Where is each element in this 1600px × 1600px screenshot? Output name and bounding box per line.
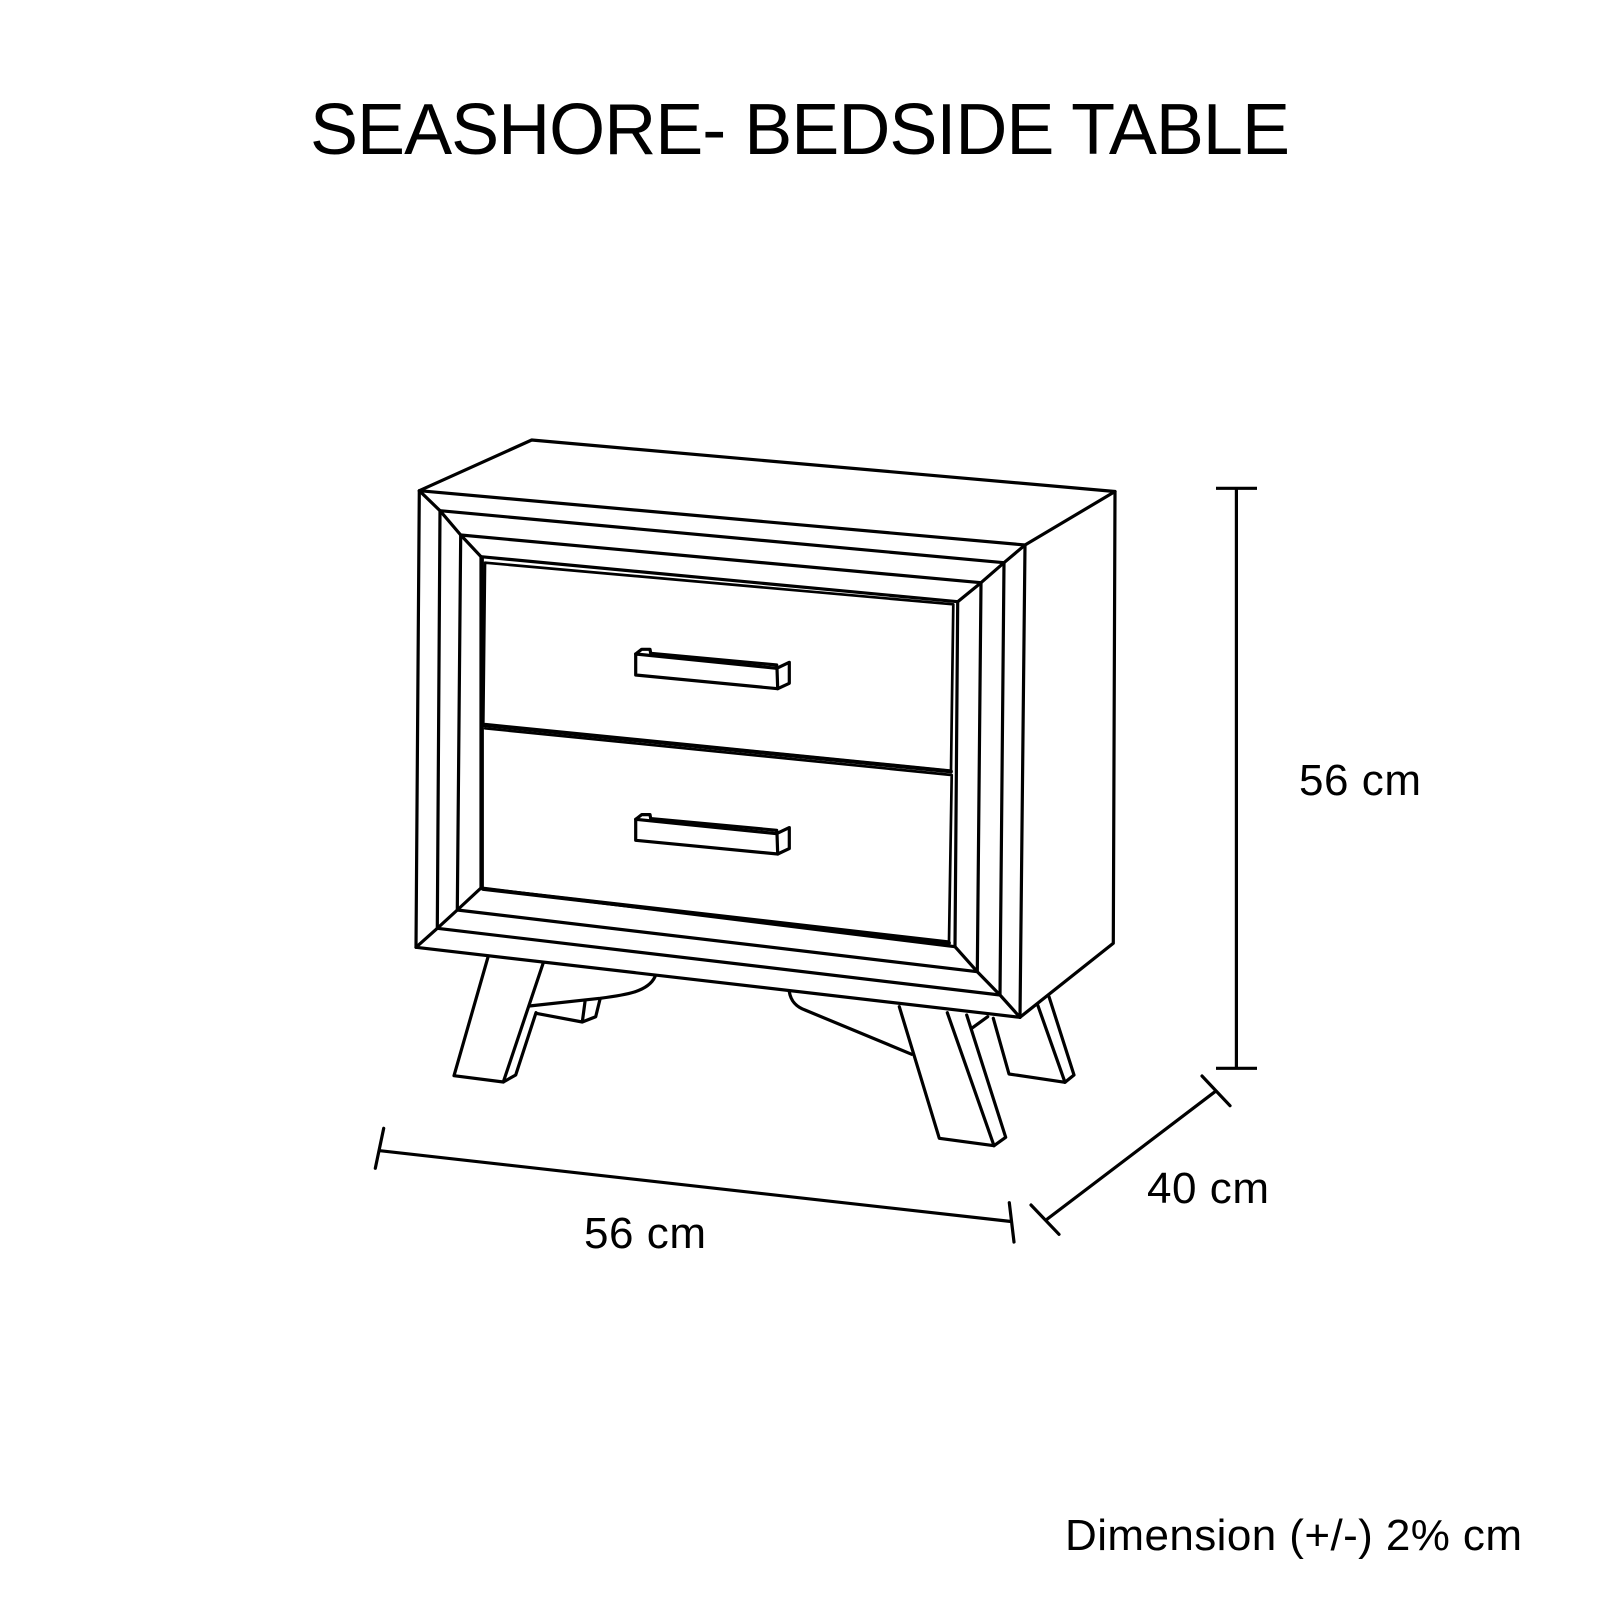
height label: 56 cm: [1299, 756, 1421, 805]
height dimension line: [1216, 488, 1257, 1068]
cabinet body: [416, 440, 1115, 1017]
width dimension line: [375, 1128, 1014, 1242]
frame mouldings: [437, 511, 1004, 995]
tolerance note: Dimension (+/-) 2% cm: [1065, 1511, 1522, 1560]
front right leg and strut: [789, 992, 1006, 1146]
back right leg: [993, 997, 1074, 1082]
depth dimension line: [1031, 1076, 1230, 1234]
title: SEASHORE- BEDSIDE TABLE: [310, 90, 1290, 170]
depth label: 40 cm: [1147, 1164, 1269, 1213]
bottom drawer handle: [636, 815, 789, 854]
bedside table illustration: [416, 440, 1115, 1146]
top drawer handle: [636, 649, 789, 689]
bottom drawer: [483, 728, 952, 942]
back left leg and strut: [454, 956, 655, 1082]
drawer shadow lines: [482, 558, 951, 943]
top drawer: [483, 563, 953, 771]
width label: 56 cm: [584, 1209, 706, 1258]
